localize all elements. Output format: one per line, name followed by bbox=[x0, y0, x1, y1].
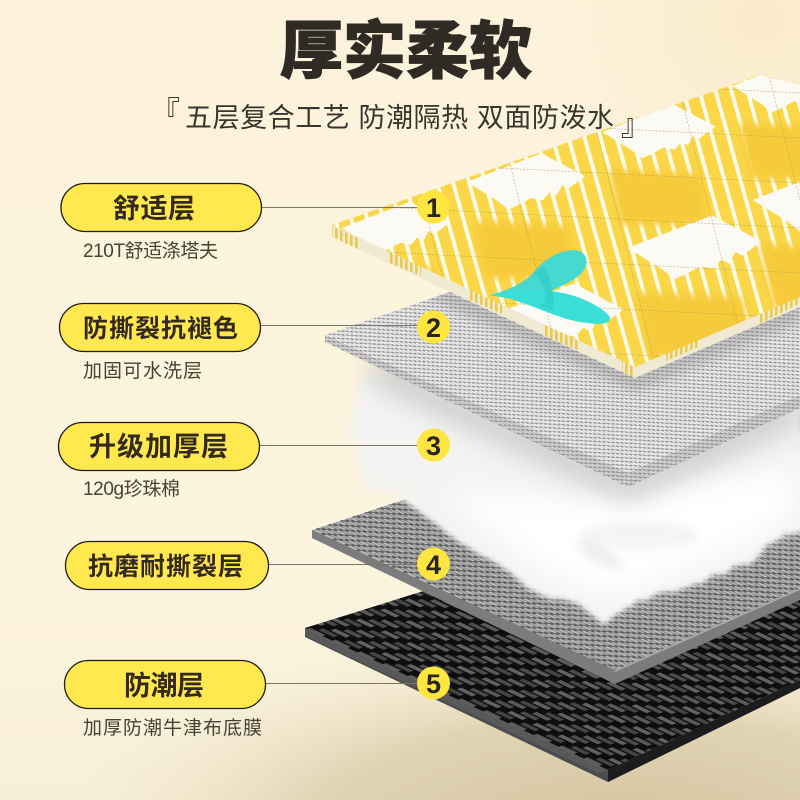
layer 4: wear-resistant layer bbox=[312, 370, 800, 684]
title: 厚实柔软 bbox=[280, 17, 532, 87]
connector lines and number badges bbox=[260, 190, 450, 700]
subtitle: 『 bbox=[151, 97, 180, 129]
label: upgraded thick layer: 120g珍珠棉 bbox=[83, 478, 180, 500]
badge 3: 3 bbox=[426, 431, 441, 461]
badge 2 bbox=[417, 310, 450, 344]
layer 3: pearl cotton fluff bbox=[352, 330, 800, 626]
label: upgraded thick layer bbox=[58, 422, 260, 500]
badge 2: 2 bbox=[426, 313, 441, 343]
quilted diamond cells bbox=[342, 75, 800, 362]
label: abrasion-resistant layer: 抗磨耐撕裂层 bbox=[88, 552, 243, 581]
subtitle bbox=[151, 97, 650, 142]
subtitle: 五层复合工艺 防潮隔热 双面防泼水 bbox=[185, 103, 614, 133]
label: comfort layer bbox=[61, 184, 262, 262]
badge 1 bbox=[417, 190, 450, 224]
layer 2: tear-resistant fade-proof layer bbox=[325, 287, 800, 486]
label: moisture-proof layer: 加厚防潮牛津布底膜 bbox=[83, 717, 262, 739]
layer 1: comfort layer bbox=[332, 75, 800, 378]
label: comfort layer: 舒适层 bbox=[113, 194, 195, 224]
stitch lines bbox=[384, 77, 800, 359]
label: moisture-proof layer: 防潮层 bbox=[124, 671, 204, 701]
badge 5 bbox=[417, 666, 450, 700]
badge 5: 5 bbox=[426, 669, 441, 699]
badge 3 bbox=[417, 428, 450, 462]
label: moisture-proof layer bbox=[64, 660, 266, 739]
icon: teal leaf logo bbox=[490, 250, 610, 324]
badge 4 bbox=[417, 548, 450, 580]
label: abrasion-resistant layer bbox=[66, 542, 268, 590]
label: upgraded thick layer: 升级加厚层 bbox=[89, 432, 228, 462]
label: tear-resistant fade-proof bbox=[60, 304, 260, 382]
layer 5: moisture-proof base film bbox=[305, 470, 800, 782]
label: comfort layer: 210T舒适涤塔夫 bbox=[83, 240, 218, 262]
label: tear-resistant fade-proof: 加固可水洗层 bbox=[83, 360, 202, 382]
label: tear-resistant fade-proof: 防撕裂抗褪色 bbox=[83, 314, 238, 343]
badge 4: 4 bbox=[426, 550, 441, 580]
subtitle: 』 bbox=[621, 110, 650, 142]
badge 1: 1 bbox=[426, 193, 441, 223]
